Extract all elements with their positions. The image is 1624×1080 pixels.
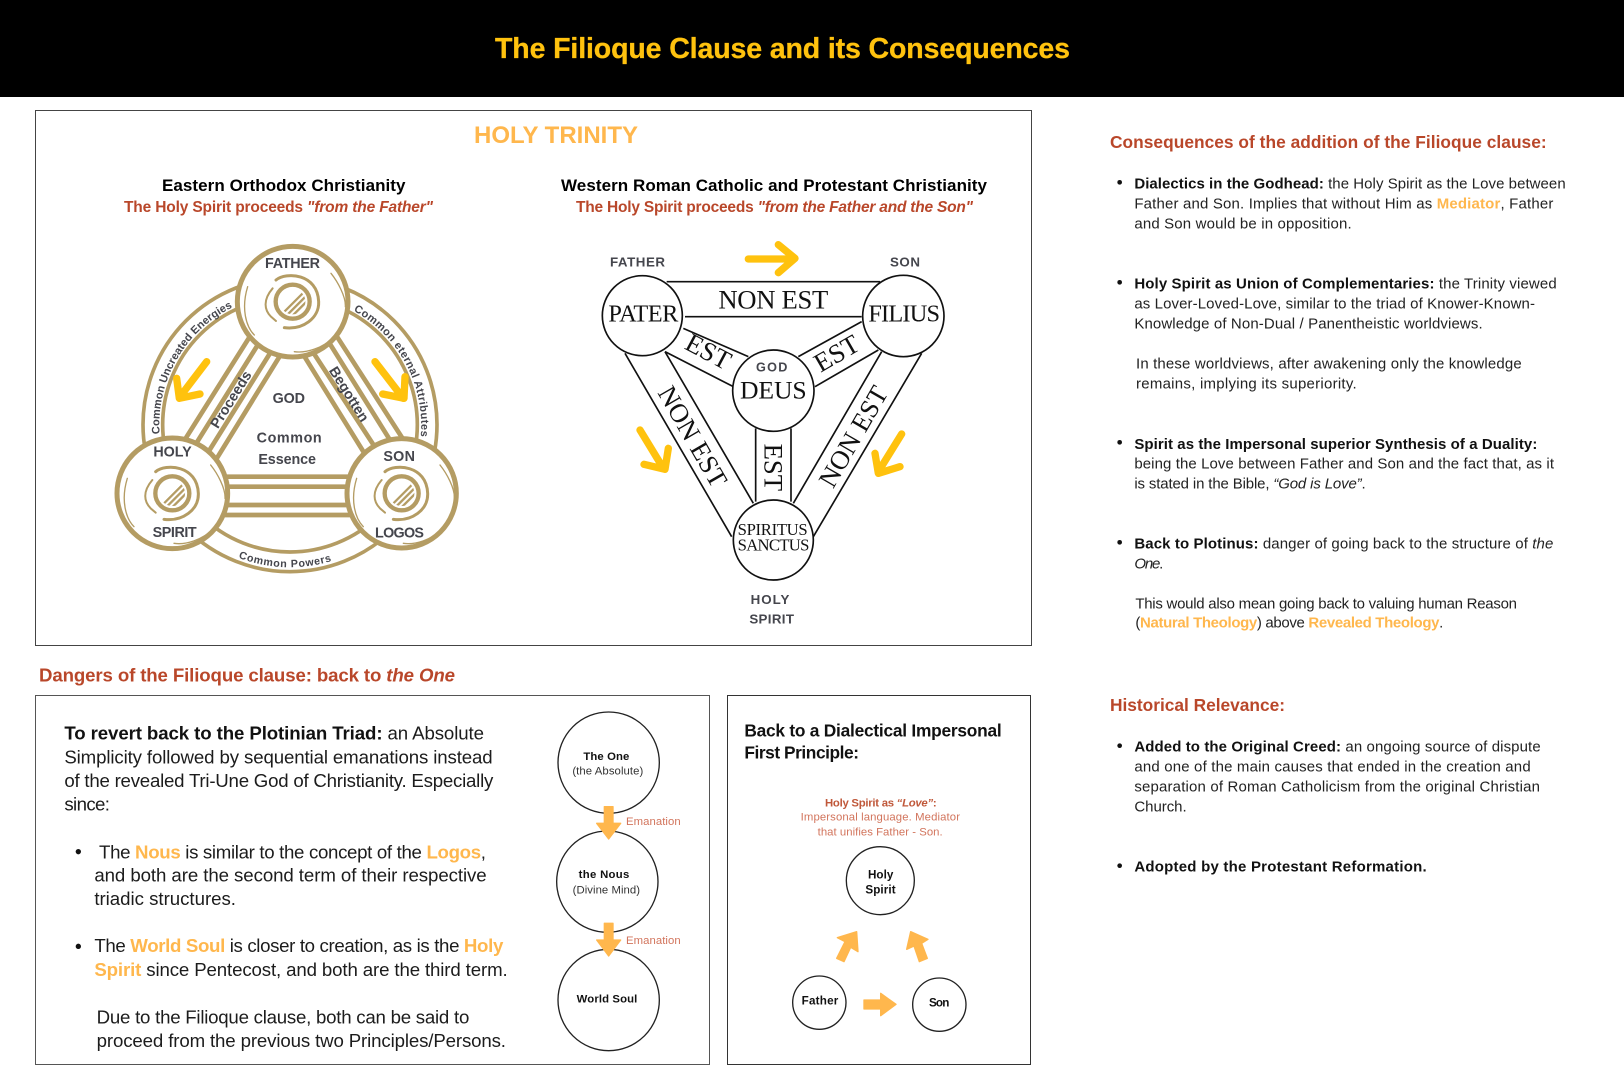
bullet: back to plotinus: (Natural Theology) above Revealed Theology.	[1135, 615, 1443, 632]
arrow: father to spirit	[837, 932, 858, 962]
arc label: eternal attributes: Common eternal Attributes	[355, 306, 428, 436]
bars	[180, 328, 408, 515]
bullet: impersonal synthesis: Spirit as the Impersonal superior Synthesis of a Duality:	[1134, 436, 1537, 453]
node: spiritus sanctus: SANCTUS	[738, 536, 809, 555]
labels: GOD	[273, 391, 305, 407]
bullet: protestant reformation: Adopted by the Protestant Reformation.	[1134, 859, 1427, 876]
diagram: western trinity	[602, 245, 944, 626]
bullet: union of complementaries	[1117, 275, 1557, 392]
panel heading: HOLY TRINITY	[474, 122, 638, 149]
person labels	[610, 255, 920, 626]
arrow: right	[375, 362, 405, 398]
labels: FATHER	[265, 256, 321, 272]
node: the one: The One	[583, 751, 629, 763]
labels: Common	[257, 431, 322, 447]
node: deus: DEUS	[740, 375, 807, 404]
text block: of the revealed Tri-Une God of Christianity. Especially	[64, 770, 494, 791]
bullet: back to plotinus: Back to Plotinus: danger of going back to the structure of the	[1134, 535, 1553, 552]
bullet: impersonal synthesis	[1117, 436, 1555, 492]
bullet: union of complementaries: remains, implying its superiority.	[1136, 375, 1357, 392]
western heading	[561, 176, 988, 216]
node: son	[913, 978, 966, 1031]
eastern heading: Eastern Orthodox Christianity	[162, 176, 406, 195]
node: pater	[602, 276, 682, 356]
node: filius: FILIUS	[868, 301, 940, 328]
node: deus	[733, 350, 814, 431]
node: father	[793, 976, 846, 1029]
outer rings	[143, 278, 437, 572]
node: holy spirit: Holy	[868, 869, 894, 882]
text block: Simplicity followed by sequential emanations instead	[64, 746, 493, 767]
panel heading: Back to a Dialectical Impersonal	[744, 721, 1002, 741]
text block: Spirit since Pentecost, and both are the third term.	[94, 959, 508, 980]
caption: Holy Spirit as “Love”:	[825, 798, 937, 810]
text block: Due to the Filioque clause, both can be said to	[97, 1006, 469, 1027]
bullet: impersonal synthesis: is stated in the Bible, “God is Love”.	[1134, 475, 1366, 492]
text block: proceed from the previous two Principles/Persons.	[97, 1030, 506, 1051]
section heading: dangers: Dangers of the Filioque clause: back to the One	[39, 665, 455, 686]
bullet: dialectics: Father and Son. Implies that without Him as Mediator, Father	[1134, 195, 1553, 212]
eastern heading	[124, 176, 434, 216]
text block: and both are the second term of their respective	[94, 864, 487, 885]
node: father	[237, 246, 348, 357]
bullet: added to creed: separation of Roman Catholicism from the original Christian	[1134, 779, 1540, 796]
node: holy spirit	[117, 438, 228, 549]
emanation diagram	[557, 712, 681, 1051]
node: deus: GOD	[756, 361, 787, 375]
text block: since:	[64, 794, 110, 815]
node: the nous: (Divine Mind)	[573, 885, 640, 897]
node: spiritus sanctus	[733, 500, 813, 580]
node: spiritus sanctus: SPIRITUS	[738, 520, 808, 539]
labels: Begotten	[325, 364, 372, 425]
node: pater: PATER	[608, 301, 679, 328]
label: emanation 2: Emanation	[626, 935, 681, 947]
relation labels: EST	[808, 328, 865, 378]
section heading: Historical Relevance:	[1110, 695, 1285, 715]
bullet: back to plotinus: One.	[1134, 555, 1163, 572]
title: The Filioque Clause and its Consequences	[495, 33, 1070, 65]
node: the nous	[557, 831, 658, 932]
labels	[153, 256, 424, 542]
node: filius	[863, 275, 944, 357]
labels: Essence	[258, 452, 316, 468]
text block	[64, 722, 508, 1051]
relation labels: NON EST	[718, 284, 828, 314]
person labels: SON	[890, 255, 920, 270]
shield lines	[625, 282, 922, 537]
bullet: dialectics: Dialectics in the Godhead: the Holy Spirit as the Love between	[1134, 175, 1566, 192]
bullet: added to creed: Church.	[1134, 799, 1187, 816]
node: world soul: World Soul	[577, 994, 637, 1006]
caption: that unifies Father - Son.	[818, 827, 943, 839]
panel: dialectical first principle	[728, 696, 1030, 1064]
node: son	[347, 439, 456, 548]
arrow: emanation 2	[597, 923, 621, 956]
relation labels: NON EST	[652, 381, 734, 492]
bullet: dialectics: and Son would be in opposition.	[1134, 215, 1352, 232]
western heading: The Holy Spirit proceeds "from the Father and the Son"	[576, 199, 974, 216]
caption	[801, 798, 960, 839]
arc label: uncreated energies: Common Uncreated Energies	[152, 303, 232, 434]
arrow: right	[875, 434, 902, 473]
panel heading: First Principle:	[744, 743, 859, 763]
relation labels	[652, 284, 894, 492]
node: holy spirit	[846, 847, 914, 915]
labels: LOGOS	[375, 526, 424, 542]
arrow: father to son	[864, 993, 896, 1016]
node: world soul	[558, 949, 659, 1051]
person labels: FATHER	[610, 255, 665, 270]
labels: Proceeds	[208, 368, 255, 431]
bullet: back to plotinus: This would also mean going back to valuing human Reason	[1135, 595, 1517, 612]
caption: Impersonal language. Mediator	[801, 812, 960, 824]
labels: HOLY	[153, 445, 192, 461]
bullet: added to creed: and one of the main causes that ended in the creation and	[1134, 759, 1531, 776]
relation labels: EST	[681, 327, 737, 376]
bullet: added to creed	[1117, 739, 1541, 816]
bullet: union of complementaries: Holy Spirit as Union of Complementaries: the Trinity viewed	[1134, 275, 1557, 292]
bullet: back to plotinus	[1117, 535, 1553, 632]
bullet: union of complementaries: Knowledge of Non-Dual / Panentheistic worldviews.	[1134, 315, 1483, 332]
arrow: left	[177, 362, 207, 398]
arrow: son to spirit	[907, 932, 928, 962]
node: father: Father	[802, 995, 839, 1008]
person labels: HOLY	[751, 592, 789, 607]
bullet: union of complementaries: In these worldviews, after awakening only the knowledge	[1136, 355, 1522, 372]
node: son: Son	[929, 997, 949, 1010]
panel heading	[744, 721, 1002, 763]
text block: To revert back to the Plotinian Triad: an Absolute	[64, 722, 484, 743]
arrow: emanation 1	[597, 807, 621, 839]
western heading: Western Roman Catholic and Protestant Christianity	[561, 176, 988, 195]
section heading: Consequences of the addition of the Filioque clause:	[1110, 132, 1547, 152]
labels: SON	[383, 449, 415, 465]
relation labels: NON EST	[812, 381, 894, 492]
text block: The World Soul is closer to creation, as is the Holy	[94, 935, 504, 956]
person labels: SPIRIT	[749, 611, 794, 626]
panel: plotinian triad	[36, 696, 710, 1064]
node: holy spirit: Spirit	[865, 884, 896, 897]
node: the nous: the Nous	[579, 869, 629, 881]
arrow: left	[640, 430, 668, 469]
label: emanation 1: Emanation	[626, 816, 681, 828]
eastern heading: The Holy Spirit proceeds "from the Father"	[124, 199, 434, 216]
bullet: union of complementaries: as Lover-Loved-Love, similar to the triad of Knower-Known-	[1134, 295, 1535, 312]
panel: holy trinity	[35, 110, 1032, 646]
diagram: eastern trinity	[114, 244, 459, 574]
column: historical relevance	[1110, 695, 1541, 876]
bullet: dialectics	[1117, 175, 1566, 232]
arc label: powers: Common Powers	[240, 552, 331, 568]
bullet: impersonal synthesis: being the Love between Father and Son and the fact that, as it	[1134, 455, 1555, 472]
node: the one	[558, 712, 659, 813]
node: the one: (the Absolute)	[572, 766, 644, 778]
labels: SPIRIT	[153, 525, 197, 541]
arrow: top	[748, 245, 795, 273]
relation labels: EST	[759, 444, 789, 491]
bullet: added to creed: Added to the Original Creed: an ongoing source of dispute	[1134, 739, 1541, 756]
column: consequences	[1110, 132, 1566, 392]
header banner	[0, 0, 1624, 97]
text block: The Nous is similar to the concept of the Logos,	[99, 841, 486, 862]
text block: triadic structures.	[94, 888, 236, 909]
